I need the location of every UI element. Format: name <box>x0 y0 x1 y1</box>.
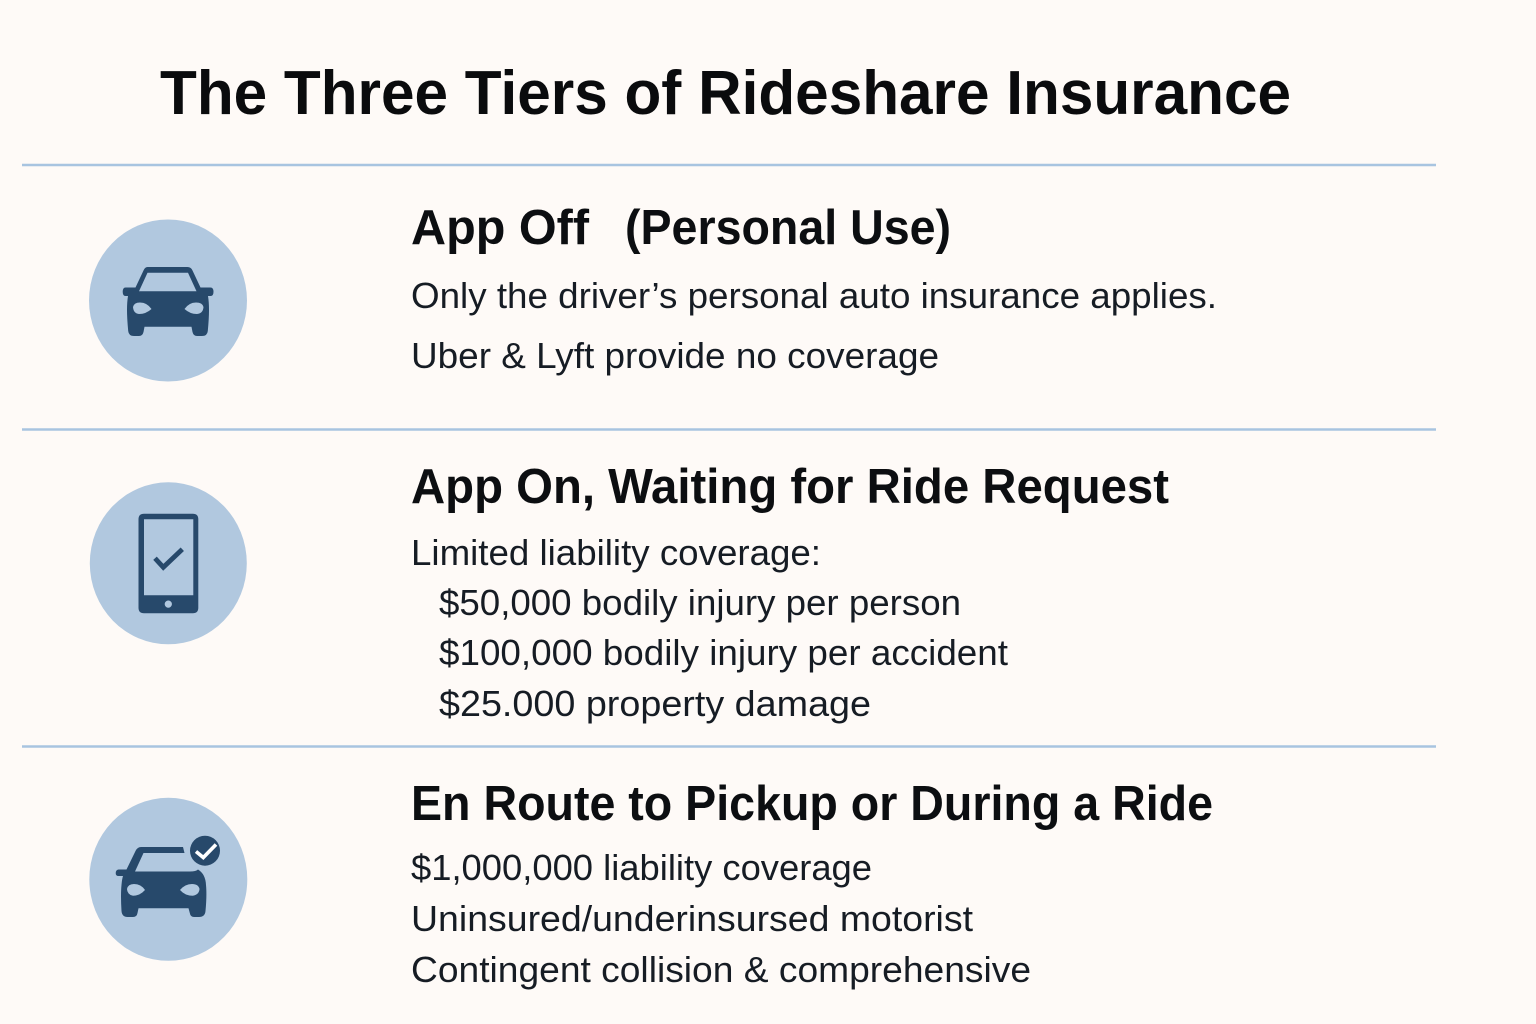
icon: car in circle <box>89 220 247 382</box>
text: personal insurance applies: Only the driver’s personal auto insurance applies. <box>411 275 1217 316</box>
heading: app on: App On, Waiting for Ride Request <box>411 460 1169 514</box>
text: property damage: $25.000 property damage <box>439 683 871 724</box>
heading: personal use: (Personal Use) <box>625 201 951 255</box>
text: bodily injury per accident: $100,000 bodily injury per accident <box>439 632 1008 673</box>
icon: phone with check in circle <box>90 482 247 644</box>
text: limited liability: Limited liability coverage: <box>411 532 821 573</box>
text: bodily injury per person: $50,000 bodily injury per person <box>439 582 961 623</box>
text: collision and comprehensive: Contingent collision & comprehensive <box>411 949 1031 990</box>
heading: en route: En Route to Pickup or During a Ride <box>411 777 1213 831</box>
title: The Three Tiers of Rideshare Insurance <box>160 59 1291 128</box>
panel: en route tier <box>89 777 1213 990</box>
panel: app off tier <box>89 201 1217 382</box>
text: liability coverage: $1,000,000 liability coverage <box>411 847 872 888</box>
text: no coverage: Uber & Lyft provide no coverage <box>411 335 939 376</box>
panel: app on tier <box>90 460 1169 724</box>
text: uninsured motorist: Uninsured/underinsursed motorist <box>411 898 973 939</box>
icon: car with check badge in circle <box>89 798 247 961</box>
heading: app off: App Off <box>411 201 590 255</box>
